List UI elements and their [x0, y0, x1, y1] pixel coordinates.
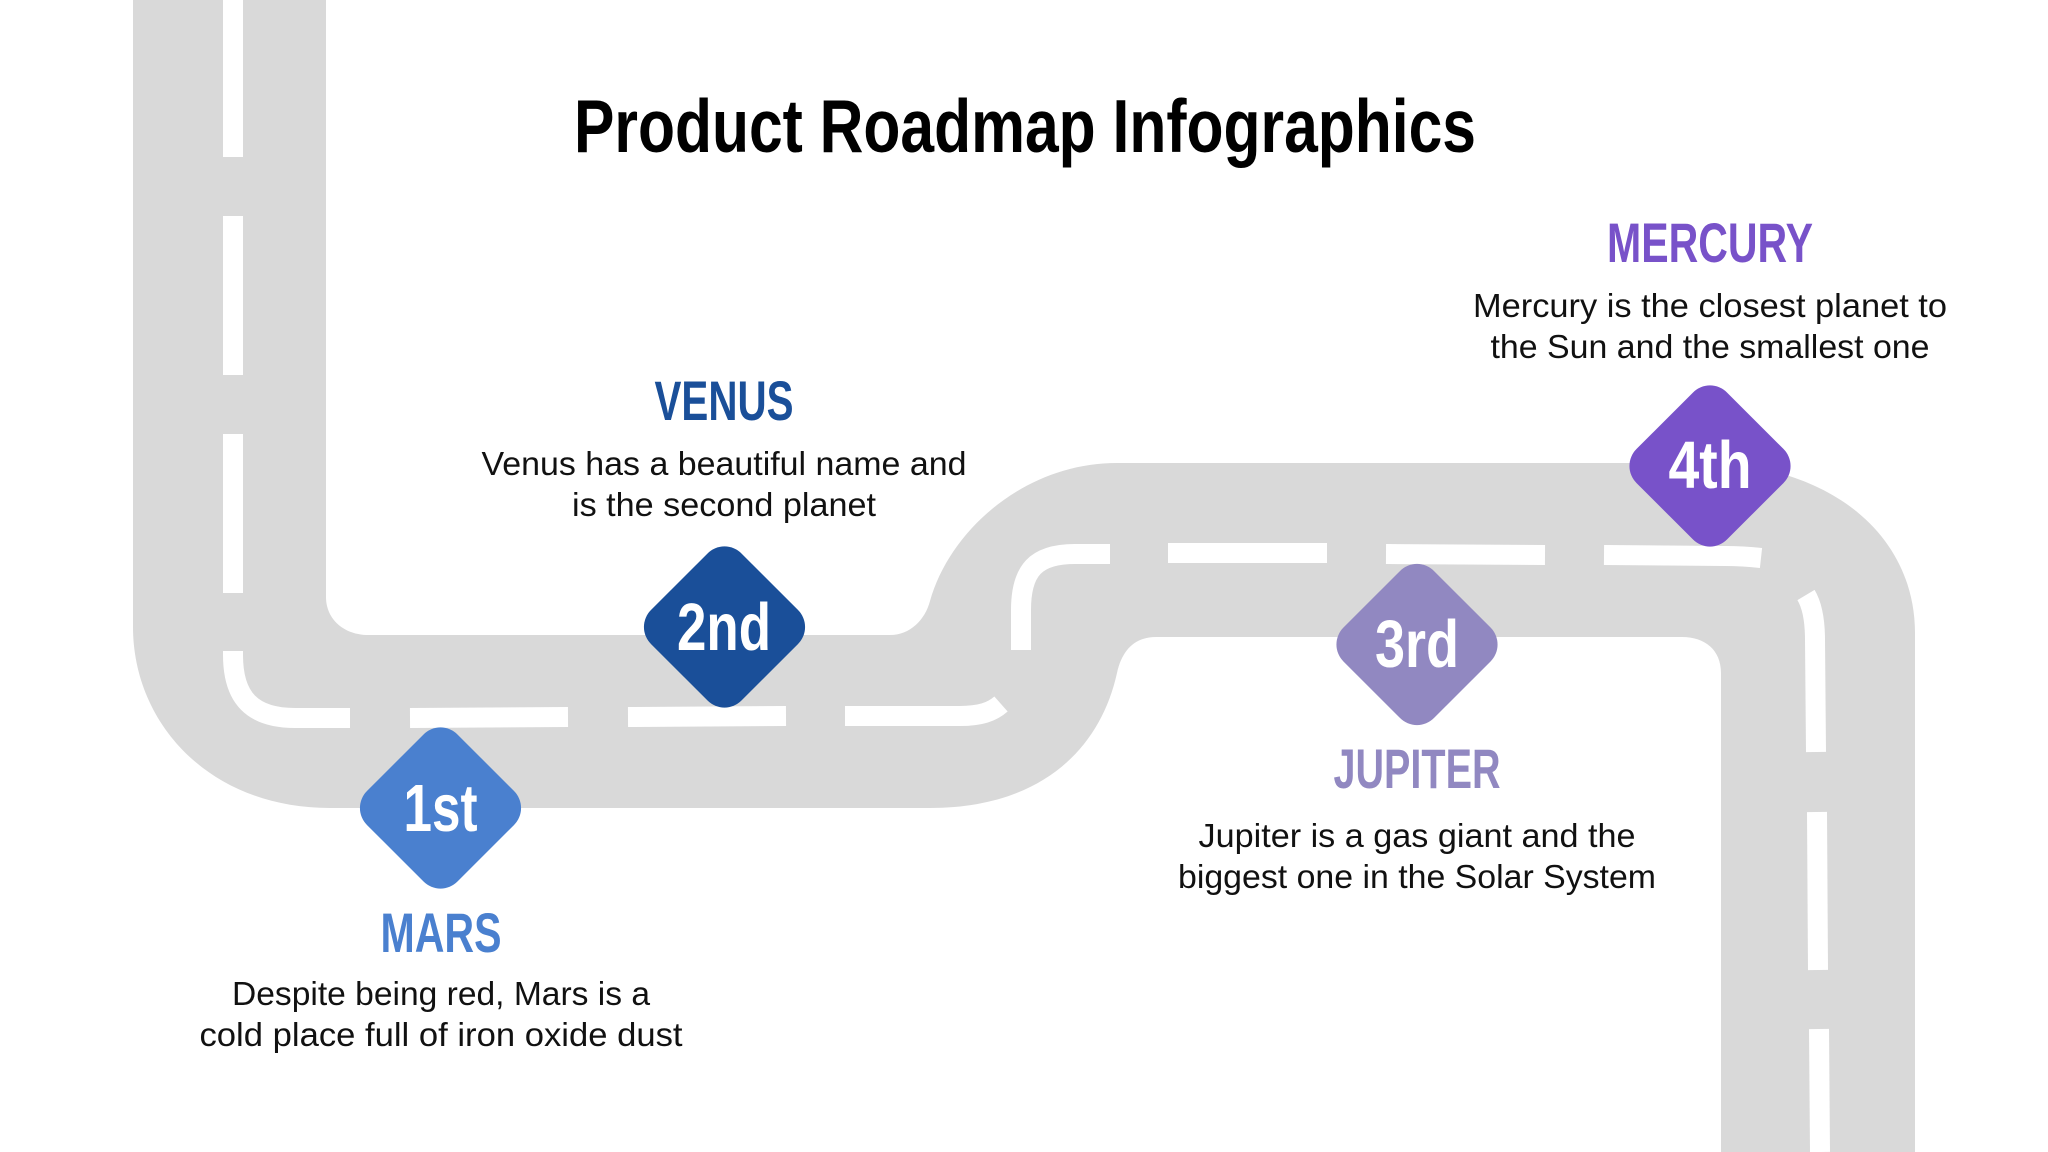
- heading: Venus: VENUS: [654, 369, 794, 432]
- heading: Mars: MARS: [380, 901, 502, 964]
- text: Venus description: [482, 445, 966, 523]
- badge: 1st: 1st: [404, 771, 478, 846]
- text: Jupiter description: Jupiter is a gas giant and the: [1198, 817, 1636, 854]
- badge: 2nd: [634, 536, 815, 718]
- badge: 1st: [350, 717, 531, 899]
- text: Jupiter description: [1178, 817, 1656, 895]
- text: Mars description: Despite being red, Mars is a: [232, 975, 651, 1012]
- text: Mars description: [200, 975, 682, 1053]
- heading: Mercury: MERCURY: [1607, 211, 1813, 274]
- text: Mars description: cold place full of iron oxide dust: [200, 1016, 682, 1053]
- milestone 3: Jupiter: [1178, 554, 1656, 895]
- text: Jupiter description: biggest one in the Solar System: [1178, 858, 1656, 895]
- text: Mercury description: [1473, 287, 1947, 365]
- badge: 4th: [1619, 375, 1801, 557]
- badge: 4th: 4th: [1668, 428, 1752, 503]
- text: Venus description: Venus has a beautiful name and: [482, 445, 966, 482]
- text: Mercury description: Mercury is the closest planet to: [1473, 287, 1947, 324]
- title: Product Roadmap Infographics: [574, 84, 1476, 168]
- milestone 4: Mercury: [1473, 211, 1947, 557]
- text: Venus description: is the second planet: [572, 486, 876, 523]
- badge: 2nd: 2nd: [677, 590, 771, 665]
- badge: 3rd: [1326, 554, 1508, 735]
- text: Mercury description: the Sun and the smallest one: [1490, 328, 1930, 365]
- milestone 1: Mars: [200, 717, 682, 1053]
- badge: 3rd: 3rd: [1375, 607, 1459, 682]
- heading: Jupiter: JUPITER: [1334, 737, 1500, 800]
- milestone 2: Venus: [482, 369, 966, 718]
